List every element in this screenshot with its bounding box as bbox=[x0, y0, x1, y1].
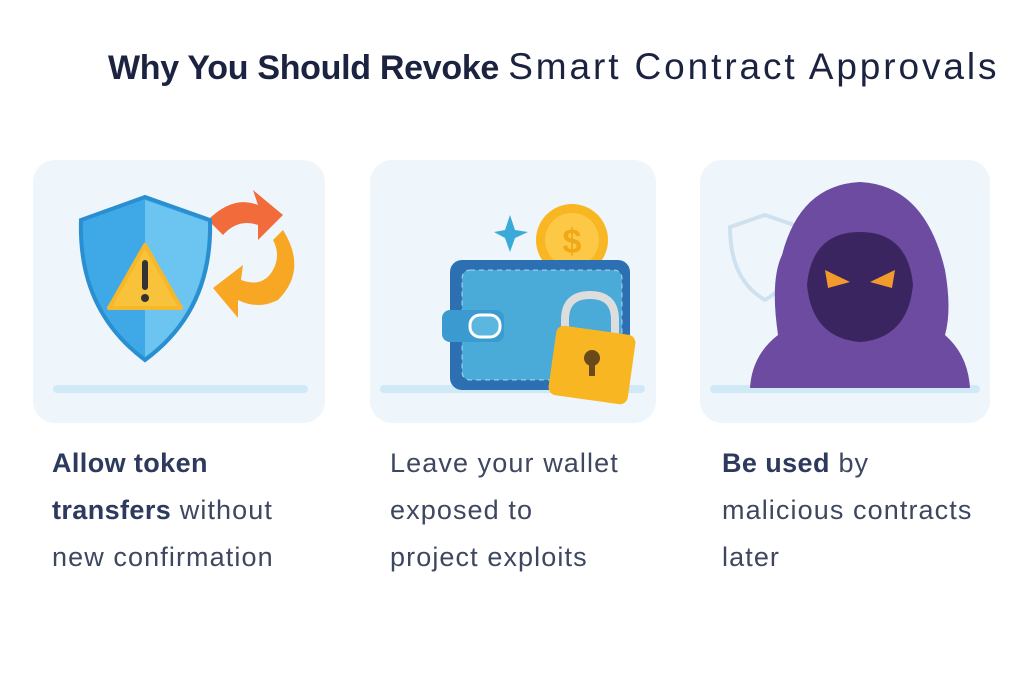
icon: coin: $ bbox=[563, 223, 582, 261]
panel: hacker bbox=[700, 160, 990, 423]
icon: coin bbox=[536, 204, 608, 276]
text: col 2 bbox=[390, 448, 619, 572]
text: col 3: later bbox=[722, 542, 780, 572]
title: Why You Should Revoke Smart Contract Approvals bbox=[108, 46, 999, 87]
text: col 2: exposed to bbox=[390, 495, 533, 525]
panel: shield bbox=[33, 160, 325, 423]
text: col 1: transfers without bbox=[52, 495, 273, 525]
icon: wallet bbox=[442, 260, 630, 390]
text: col 3: malicious contracts bbox=[722, 495, 972, 525]
text: col 1: new confirmation bbox=[52, 542, 274, 572]
text: col 1: Allow token bbox=[52, 448, 208, 478]
icon: hacker bbox=[750, 182, 970, 388]
text: col 2: Leave your wallet bbox=[390, 448, 619, 478]
icon: faint shield bbox=[730, 215, 800, 300]
text: col 3: Be used by bbox=[722, 448, 869, 478]
text: col 3 bbox=[722, 448, 972, 572]
panel: wallet bbox=[370, 160, 656, 423]
text: col 2: project exploits bbox=[390, 542, 588, 572]
icon: star bbox=[494, 215, 528, 252]
icon: shield bbox=[81, 197, 210, 360]
icon: arrows bbox=[208, 190, 294, 318]
text: col 1 bbox=[52, 448, 274, 572]
icon: padlock bbox=[548, 295, 636, 405]
